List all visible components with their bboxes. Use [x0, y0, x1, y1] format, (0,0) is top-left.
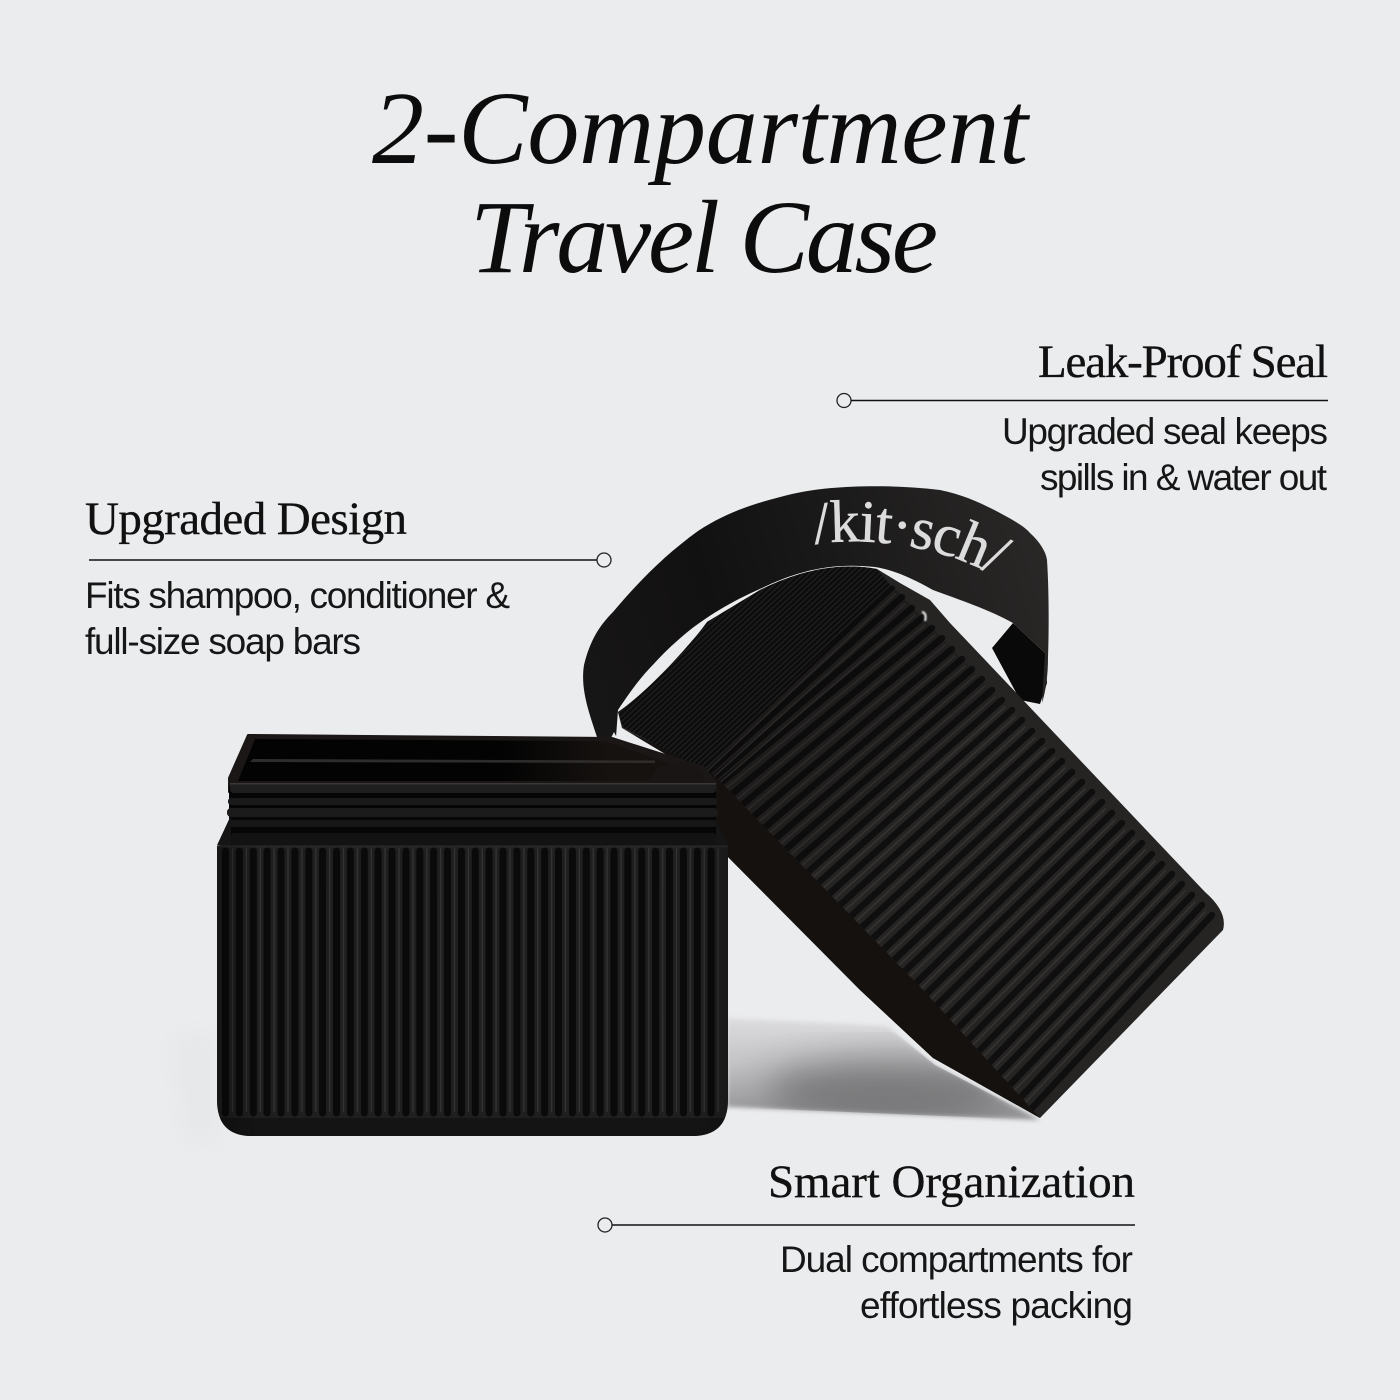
title: [372, 71, 1030, 295]
lid fine-ribbed band: [618, 567, 892, 770]
infographic canvas: [86, 94, 1328, 1326]
callout: leak-proof seal: [837, 336, 1328, 498]
logo on strap: [814, 500, 1014, 571]
threaded neck: [227, 783, 718, 850]
lid corner highlight: [922, 612, 926, 621]
tilted lid: [618, 567, 1224, 1118]
title: 2-Compartment: [372, 71, 1030, 186]
title: Travel Case: [470, 180, 938, 295]
lid silhouette: [618, 567, 1224, 1118]
callout: smart organization: Smart Organization: [768, 1156, 1135, 1208]
small background notch: [611, 732, 617, 738]
lid strap: [583, 486, 1049, 737]
callout: upgraded design: Fits shampoo, conditioner &: [85, 575, 510, 616]
callout: upgraded design: [85, 493, 611, 662]
open container base: [217, 735, 728, 1136]
lid coarse-ribbed face: [700, 585, 1212, 1108]
callout: leak-proof seal: Upgraded seal keeps: [1002, 411, 1328, 452]
container rim and interior: [229, 735, 716, 792]
callout: smart organization: [598, 1156, 1135, 1326]
callout: leak-proof seal: Leak-Proof Seal: [1038, 336, 1328, 388]
callout: smart organization: Dual compartments for: [780, 1239, 1133, 1280]
cast shadow: [170, 1018, 1040, 1146]
logo on strap: /kit·sch/: [814, 500, 1014, 571]
lid side wall: [622, 728, 1040, 1118]
background gap between strap and lid: [618, 622, 707, 710]
callout: smart organization: effortless packing: [860, 1285, 1133, 1326]
strap front band: [583, 486, 1049, 737]
callout: upgraded design: full-size soap bars: [85, 621, 361, 662]
callout: upgraded design: Upgraded Design: [85, 493, 407, 545]
ribbed container body: [217, 815, 728, 1136]
callout: leak-proof seal: spills in & water out: [1040, 457, 1328, 498]
strap inner back: [992, 623, 1047, 704]
